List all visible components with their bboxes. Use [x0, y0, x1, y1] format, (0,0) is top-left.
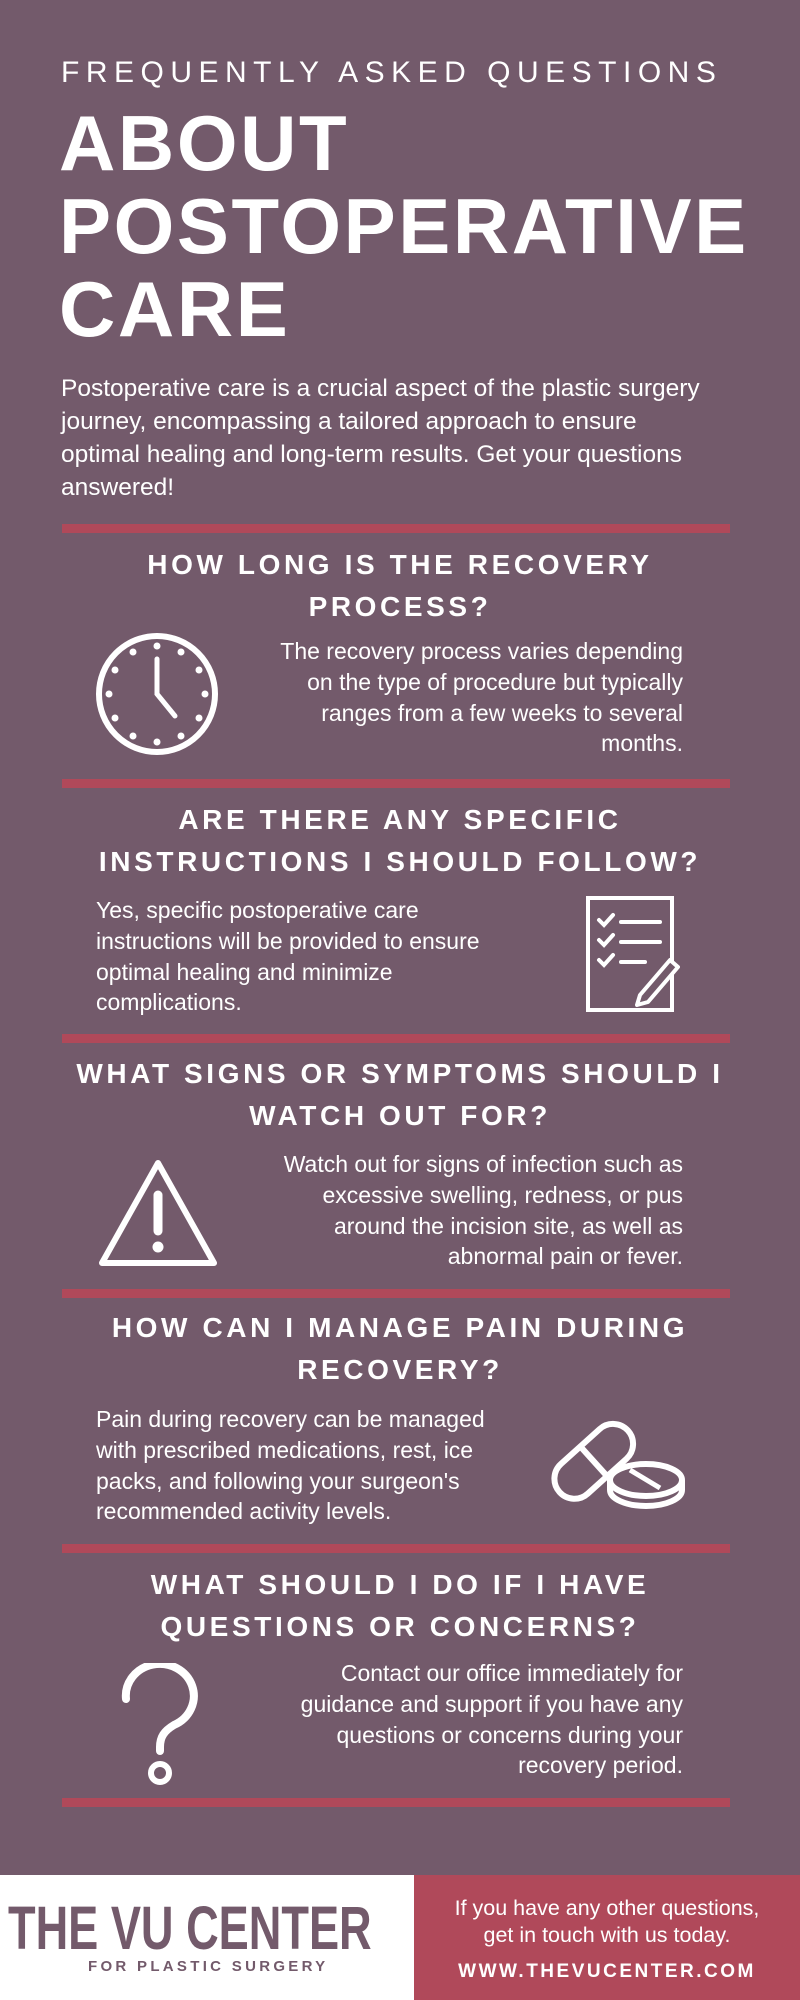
text 5: questions or concerns during your [337, 1722, 683, 1748]
heading 4: HOW CAN I MANAGE PAIN DURING [112, 1312, 688, 1343]
heading 1: HOW LONG IS THE RECOVERY [147, 549, 653, 580]
contact text [455, 1896, 759, 1947]
text 2: optimal healing and minimize [96, 959, 393, 985]
text 1 [280, 638, 683, 756]
website: WWW.THEVUCENTER.COM [458, 1961, 756, 1982]
heading 2 [99, 804, 701, 877]
text 3: around the incision site, as well as [334, 1213, 683, 1239]
text 3 [284, 1151, 683, 1269]
title [59, 99, 749, 353]
section 3: symptoms [76, 1058, 724, 1269]
icon: pills [551, 1420, 685, 1509]
section 2: instructions [96, 804, 701, 1015]
text 5: guidance and support if you have any [301, 1691, 683, 1717]
heading 1 [147, 549, 653, 622]
text 1: The recovery process varies depending [280, 638, 683, 664]
heading 5: WHAT SHOULD I DO IF I HAVE [151, 1569, 649, 1600]
logo tagline: FOR PLASTIC SURGERY [88, 1958, 328, 1975]
contact panel [414, 1875, 800, 2000]
text 4: Pain during recovery can be managed [96, 1406, 485, 1432]
heading 4: RECOVERY? [297, 1354, 503, 1385]
footer [0, 1875, 800, 2000]
section 5: questions [122, 1569, 683, 1785]
intro text: Postoperative care is a crucial aspect of the plastic surgery [61, 375, 700, 402]
contact text: If you have any other questions, [455, 1896, 759, 1920]
heading 2: INSTRUCTIONS I SHOULD FOLLOW? [99, 846, 701, 877]
text 1: months. [601, 730, 683, 756]
text 1: ranges from a few weeks to several [321, 700, 683, 726]
text 4: packs, and following your surgeon's [96, 1468, 460, 1494]
heading 5 [150, 1569, 649, 1642]
text 1: on the type of procedure but typically [307, 669, 683, 695]
heading 5: QUESTIONS OR CONCERNS? [160, 1611, 640, 1642]
text 4 [96, 1406, 485, 1524]
intro text: optimal healing and long-term results. Get your questions [61, 441, 682, 468]
text 2: instructions will be provided to ensure [96, 928, 480, 954]
logo panel [0, 1875, 414, 2000]
text 2: complications. [96, 989, 242, 1015]
text 3: Watch out for signs of infection such as [284, 1151, 683, 1177]
icon: question mark [122, 1663, 198, 1785]
section 4: pain [96, 1312, 688, 1524]
icon: warning [99, 1160, 217, 1266]
section 1: recovery [96, 549, 683, 756]
text 5 [301, 1660, 683, 1778]
heading 3 [76, 1058, 724, 1131]
text 3: abnormal pain or fever. [448, 1243, 683, 1269]
title: CARE [59, 265, 290, 353]
intro text [60, 375, 700, 501]
heading 3: WATCH OUT FOR? [249, 1100, 551, 1131]
heading 1: PROCESS? [309, 591, 491, 622]
title: ABOUT [59, 99, 349, 187]
text 2: Yes, specific postoperative care [96, 897, 419, 923]
text 3: excessive swelling, redness, or pus [322, 1182, 683, 1208]
icon: clock [96, 633, 218, 755]
text 2 [96, 897, 480, 1015]
text 5: Contact our office immediately for [341, 1660, 683, 1686]
icon: checklist [586, 896, 680, 1012]
contact text: get in touch with us today. [484, 1923, 730, 1947]
heading 3: WHAT SIGNS OR SYMPTOMS SHOULD I [76, 1058, 724, 1089]
intro text: answered! [61, 474, 174, 501]
logo wordmark: THE VU CENTER [8, 1894, 372, 1962]
intro text: journey, encompassing a tailored approach to ensure [61, 408, 637, 435]
heading 4 [112, 1312, 688, 1385]
text 4: recommended activity levels. [96, 1498, 391, 1524]
subtitle: FREQUENTLY ASKED QUESTIONS [61, 56, 722, 89]
text 4: with prescribed medications, rest, ice [96, 1437, 473, 1463]
text 5: recovery period. [518, 1752, 683, 1778]
title: POSTOPERATIVE [59, 182, 749, 270]
heading 2: ARE THERE ANY SPECIFIC [178, 804, 622, 835]
